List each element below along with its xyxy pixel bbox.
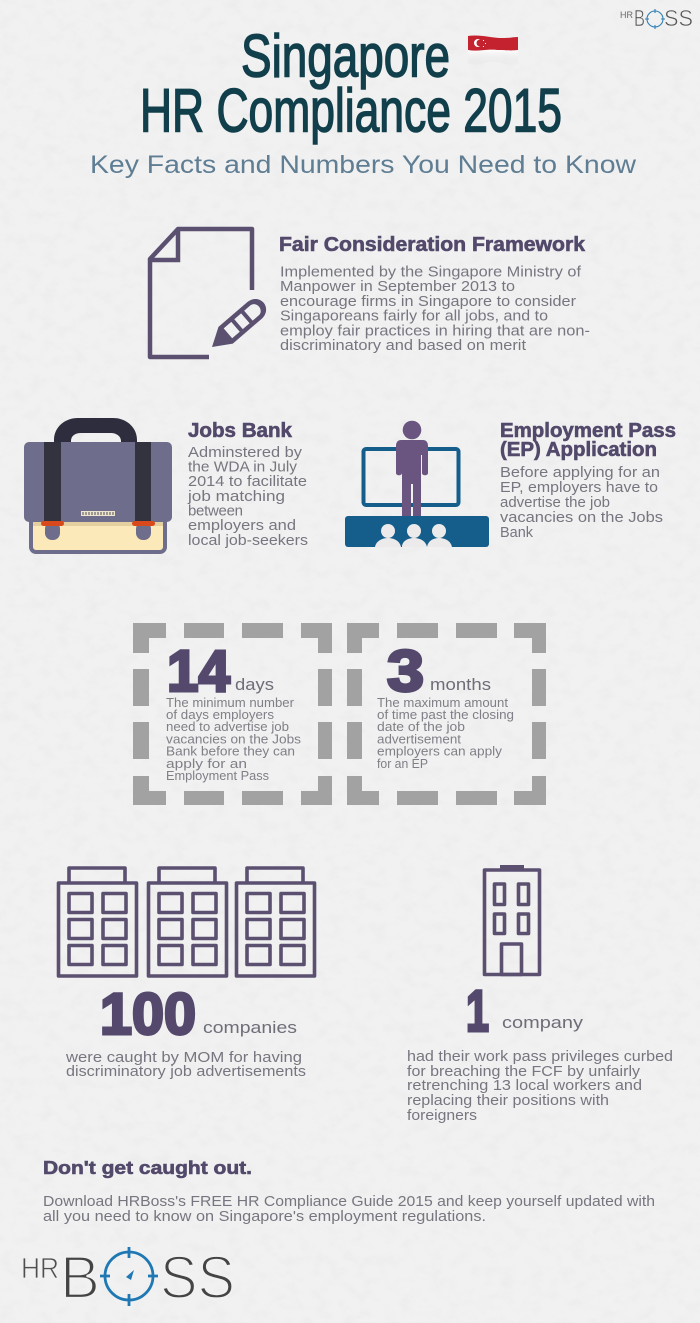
logo: HRBoss large bottom left [21, 1244, 235, 1311]
text: 3 months description [377, 695, 514, 771]
text: framework description: employ fair practices in hiring that are non- [280, 322, 590, 339]
logo: HRBoss large bottom left: B [60, 1244, 100, 1311]
text: call to action description: all you need to know on Singapore's employment regulations. [43, 1208, 486, 1225]
text: 3 months description: advertisement [377, 732, 461, 746]
text: call to action description [43, 1193, 655, 1225]
text: 3 months description: for an EP [377, 756, 428, 771]
text: framework description [280, 264, 590, 354]
text: Jobs Bank description: 2014 to facilitate [188, 473, 307, 490]
panel: Jobs Bank [24, 418, 308, 552]
panel: Employment Pass Application [345, 420, 676, 547]
text: Jobs Bank description: employers and [188, 517, 296, 534]
text: 3 months description: date of the job [377, 719, 465, 734]
text: Jobs Bank description: local job-seekers [188, 532, 308, 549]
unit: company: company [502, 1013, 584, 1032]
text: 3 months description: The maximum amount [377, 695, 508, 710]
panel: 3 months [347, 623, 546, 805]
text: 3 months description: employers can apply [377, 744, 503, 758]
text: 14 days description: The minimum number [166, 695, 295, 710]
text: 100 companies description: discriminatory job advertisements [66, 1063, 306, 1080]
text: Employment Pass description: vacancies on the Jobs [500, 509, 663, 526]
number: 1: 1 [466, 979, 489, 1044]
icon: presenter on stage [345, 421, 489, 547]
title: Singapore [241, 22, 450, 90]
heading: Employment Pass Application [500, 420, 676, 461]
text: Jobs Bank description: Adminstered by [188, 444, 303, 461]
text: 14 days description [166, 695, 302, 783]
text: Jobs Bank description: the WDA in July [188, 458, 298, 476]
text: framework description: encourage firms in Singapore to consider [280, 293, 576, 310]
panel: 14 days [133, 623, 332, 805]
heading: Employment Pass Application: Employment Pass [500, 420, 676, 442]
text: 14 days description: Employment Pass [166, 768, 269, 783]
text: 14 days description: Bank before they can [166, 744, 295, 758]
number: 14: 14 [167, 639, 230, 704]
unit: days: days [235, 675, 274, 694]
panel: 1 company [407, 865, 673, 1124]
text: 14 days description: need to advertise job [166, 719, 289, 734]
logo: HRBoss small top right: HR [620, 10, 633, 21]
icon: briefcase [24, 418, 172, 552]
text: Jobs Bank description [187, 444, 308, 549]
text: 14 days description: vacancies on the Jobs [166, 732, 302, 746]
number: 100: 100 [100, 982, 196, 1047]
text: Employment Pass description: advertise the job [500, 494, 610, 511]
icon: Singapore flag [468, 35, 518, 65]
text: framework description: Implemented by the Singapore Ministry of [280, 264, 582, 280]
subtitle: Key Facts and Numbers You Need to Know [90, 151, 637, 179]
text: framework description: Manpower in September 2013 to [280, 278, 515, 295]
logo: HRBoss large bottom left: SS [160, 1244, 235, 1311]
heading: Jobs Bank: Jobs Bank [188, 420, 293, 442]
text: 1 company description [407, 1048, 673, 1124]
icon: three office buildings [58, 868, 314, 976]
logo: HRBoss small top right: SS [664, 5, 693, 31]
text: 1 company description: replacing their positions with [407, 1092, 609, 1109]
callout: Don't get caught out [43, 1158, 655, 1225]
panel: Fair Consideration Framework [150, 229, 590, 357]
text: 1 company description: foreigners [407, 1107, 477, 1124]
unit: months: months [430, 675, 491, 694]
text: Employment Pass description [500, 464, 663, 541]
logo: HRBoss small top right [620, 5, 693, 31]
number: 3: 3 [387, 639, 424, 704]
text: Employment Pass description: Before applying for an [500, 464, 660, 481]
heading: Employment Pass Application: (EP) Application [500, 439, 657, 461]
text: 14 days description: of days employers [166, 707, 275, 722]
text: Employment Pass description: EP, employers have to [500, 479, 658, 496]
text: 1 company description: retrenching 13 local workers and [407, 1077, 642, 1094]
heading: Fair Consideration Framework: Fair Consideration Framework [279, 234, 586, 256]
text: 1 company description: for breaching the FCF by unfairly [407, 1063, 641, 1080]
dashed frame: 3 months [347, 623, 546, 805]
text: framework description: discriminatory and based on merit [280, 337, 527, 354]
icon: single office building [484, 865, 540, 974]
heading: call to action: Don't get caught out. [43, 1158, 252, 1178]
logo: HRBoss large bottom left: HR [21, 1253, 59, 1285]
panel: 100 companies [58, 868, 314, 1080]
unit: companies: companies [203, 1018, 297, 1037]
text: 14 days description: apply for an [166, 756, 247, 771]
text: Jobs Bank description: job matching [187, 488, 285, 505]
dashed frame: 14 days [133, 623, 332, 805]
title [140, 22, 562, 144]
text: 1 company description: had their work pass privileges curbed [407, 1048, 673, 1065]
text: call to action description: Download HRBoss's FREE HR Compliance Guide 2015 and keep yourself updated with [43, 1193, 655, 1210]
text: 100 companies description [65, 1049, 306, 1080]
icon: document and pencil [150, 229, 271, 357]
logo: HRBoss small top right: B [634, 5, 645, 31]
text: Employment Pass description: Bank [500, 524, 533, 541]
text: framework description: Singaporeans fairly for all jobs, and to [280, 308, 548, 325]
text: 3 months description: of time past the closing [377, 707, 514, 722]
text: 100 companies description: were caught by MOM for having [65, 1049, 302, 1066]
text: Jobs Bank description: between [188, 502, 243, 520]
